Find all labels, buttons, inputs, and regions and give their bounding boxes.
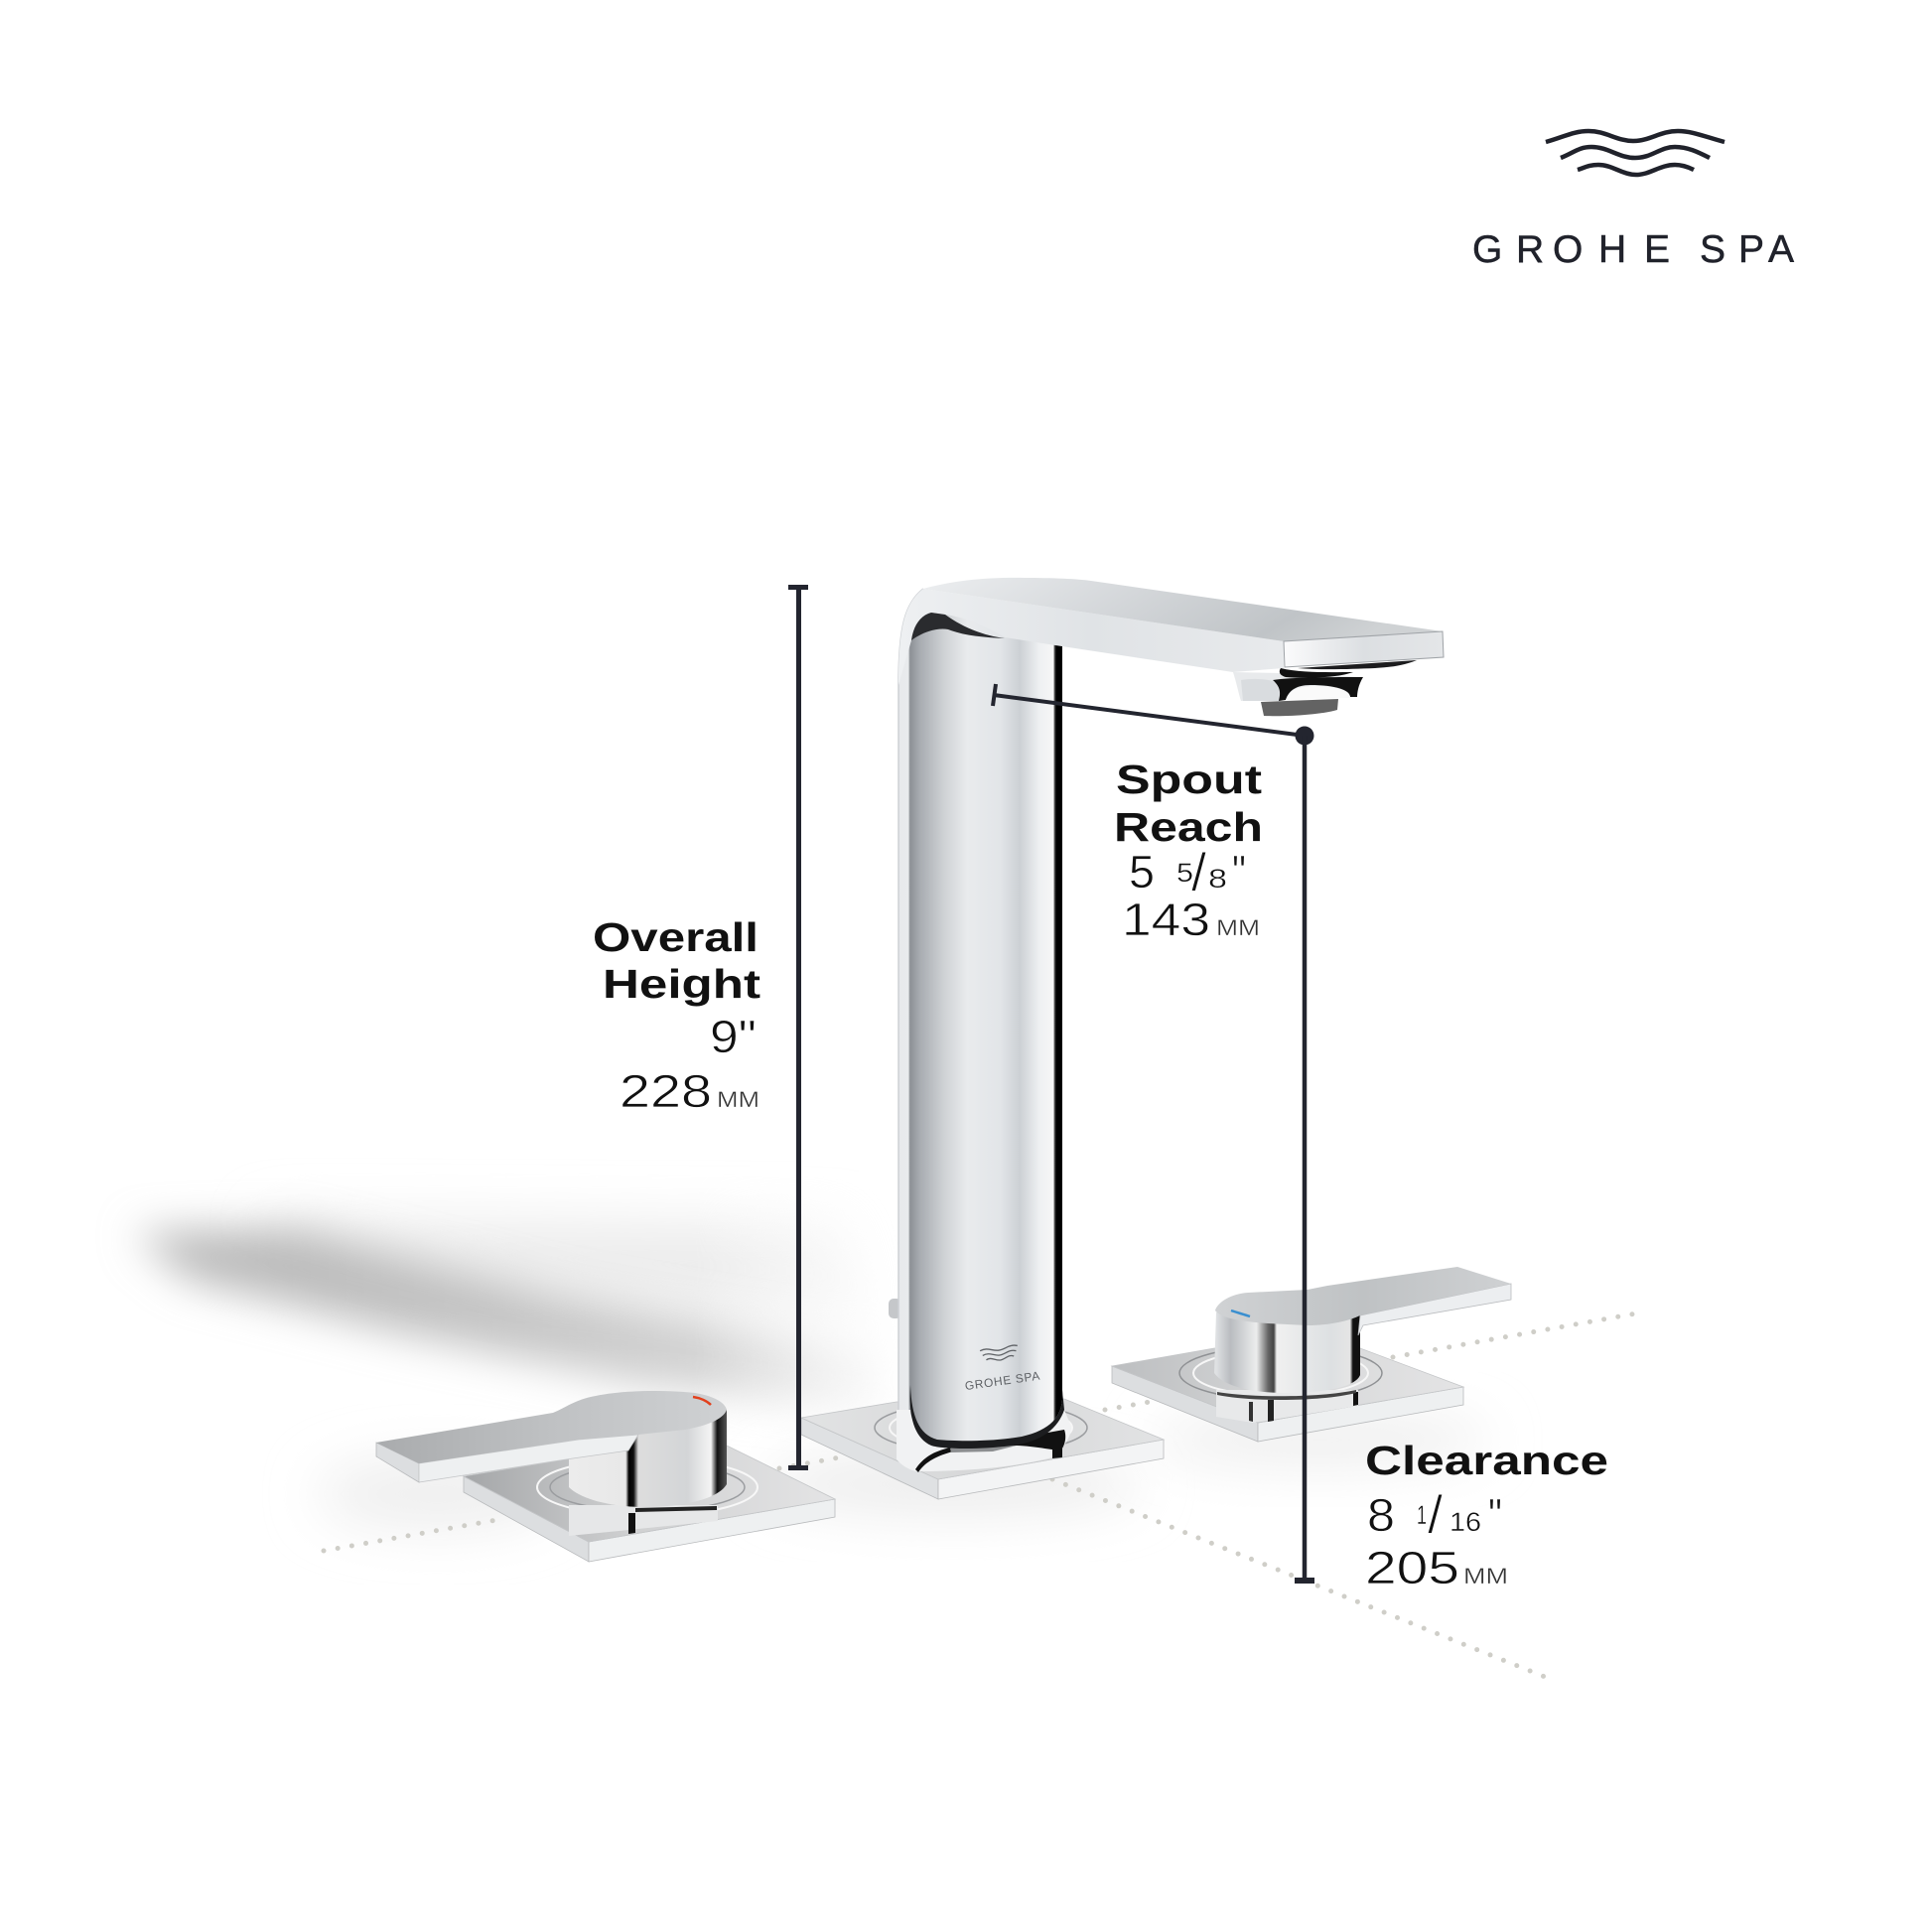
spout front strip [898,589,1284,685]
label: clearance: / [1428,1485,1443,1545]
label: spout reach: " [1232,846,1246,897]
spout inner arch [911,613,1005,640]
right valve body [1214,1312,1360,1393]
cold indicator [1231,1311,1250,1316]
spout [898,578,1444,716]
label: spout reach: 5 [1176,858,1193,888]
label: clearance: Clearance [1365,1438,1608,1483]
label: spout reach: / [1191,843,1206,902]
center base plate [801,1399,1164,1499]
label: spout reach: Spout [1116,757,1262,802]
left valve body [569,1410,727,1507]
logo wordmark: GROHE SPA [1472,228,1794,271]
column rim shade [910,1385,1064,1449]
drain knob [889,1299,901,1318]
label: spout reach: 143 [1122,894,1210,945]
spout tip [1284,631,1444,667]
label: clearance: 16 [1449,1507,1481,1537]
left lever [376,1391,727,1482]
label: clearance: MM [1463,1564,1508,1588]
faucet collar [897,1410,1071,1472]
aerator [1233,668,1363,716]
column left edge [898,589,923,1410]
column engraved logo [960,1342,1040,1393]
logo: Grohe Spa [1472,131,1794,271]
label: clearance [1365,1438,1608,1593]
label: clearance: 1 [1417,1500,1427,1530]
label: overall height: Height [603,961,760,1007]
right lever [1215,1267,1511,1335]
infographic canvas [133,129,1795,1679]
label: spout reach: Reach [1114,804,1263,850]
label: overall height: MM [717,1087,759,1112]
logo waves [1546,131,1725,175]
label: overall height: 9" [710,1011,757,1062]
label: spout reach: 8 [1208,864,1227,894]
label: overall height [593,914,760,1117]
dimension: overall height [788,585,808,1470]
cast shadow [134,1219,894,1415]
dimension: spout reach and clearance [993,684,1314,1581]
soft contact shadows [318,1414,1489,1529]
dotted floor guide lines [324,1313,1636,1681]
label: overall height: Overall [593,914,759,960]
label: clearance: 8 [1367,1489,1395,1541]
label: spout reach [1114,757,1263,945]
label: clearance: " [1488,1489,1502,1541]
engraved waves [980,1344,1019,1363]
label: spout reach: MM [1216,915,1260,940]
label: overall height: 228 [620,1065,712,1117]
label: spout reach: 5 [1129,846,1155,897]
right base plate [1112,1346,1463,1442]
faucet column [898,589,1062,1441]
right handle [1112,1267,1511,1442]
spout top surface [923,578,1443,641]
left base plate [464,1445,835,1562]
spout underside blade [1298,660,1417,669]
label: clearance: 205 [1365,1542,1459,1593]
left handle [376,1391,835,1562]
hot indicator [693,1397,711,1405]
center faucet [801,578,1444,1499]
engraved wordmark: GROHE SPA [964,1369,1040,1393]
